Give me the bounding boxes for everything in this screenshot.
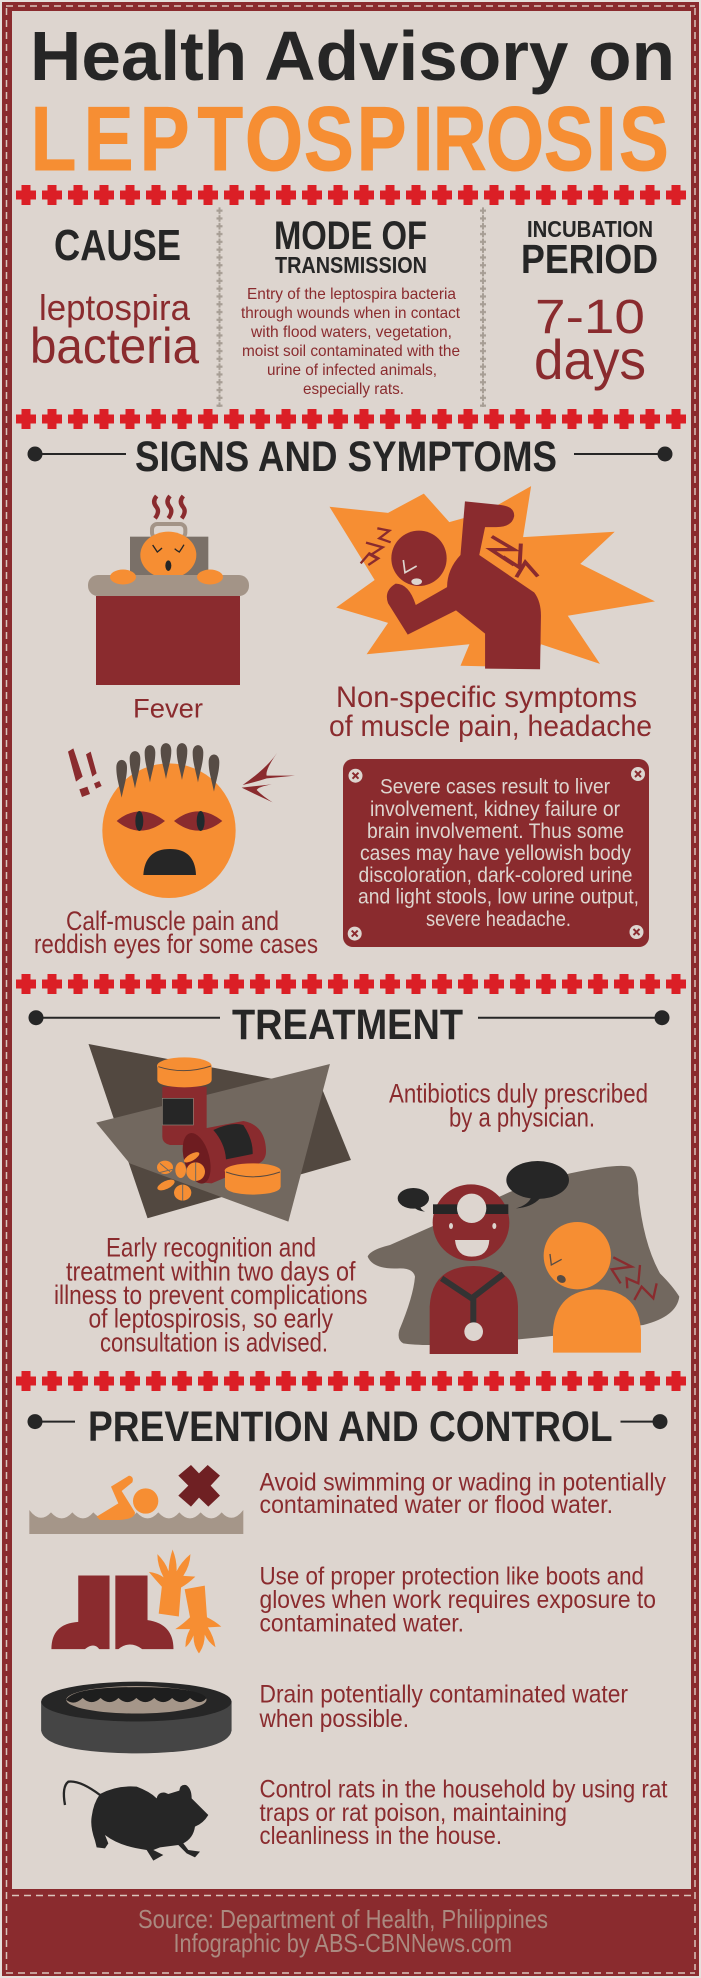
cross divider 3	[16, 974, 686, 994]
text: drain: Drain potentially contaminated water	[260, 1681, 628, 1709]
incubation heading	[521, 216, 658, 282]
icon: doctor and patient	[368, 1161, 679, 1354]
cause heading: CAUSE	[54, 221, 181, 270]
label: non-specific symptoms: of muscle pain, headache	[329, 710, 652, 743]
cause text: leptospira	[39, 287, 191, 328]
icon: reddish eyes	[68, 743, 295, 898]
icon: tire with water	[41, 1682, 232, 1753]
icon: muscle pain	[329, 486, 655, 669]
callout text: involvement, kidney failure or	[370, 798, 620, 821]
callout text: and light stools, low urine output,	[358, 886, 639, 909]
label: early recognition: treatment within two days of	[66, 1257, 356, 1287]
label: early recognition: of leptospirosis, so early	[88, 1304, 333, 1334]
text: protection: gloves when work requires exposure to	[260, 1586, 656, 1614]
incubation heading: PERIOD	[521, 236, 658, 282]
label: non-specific symptoms	[329, 681, 652, 743]
incubation text	[534, 291, 646, 391]
footer: source: Source: Department of Health, Philippines	[138, 1904, 548, 1934]
mode text: moist soil contaminated with the	[242, 343, 460, 360]
label: calf-muscle pain	[34, 906, 318, 959]
label: early recognition: Early recognition and	[106, 1233, 316, 1263]
mode text	[241, 286, 461, 398]
label: early recognition: illness to prevent complications	[54, 1280, 368, 1310]
panel: severe cases callout	[343, 759, 649, 947]
incubation heading: INCUBATION	[527, 216, 653, 242]
cross divider 4	[16, 1371, 686, 1391]
icon: no swimming	[29, 1465, 243, 1534]
text: drain	[259, 1681, 628, 1733]
heading: signs and symptoms: SIGNS AND SYMPTOMS	[135, 433, 557, 481]
screws	[348, 767, 645, 941]
label: antibiotics: Antibiotics duly prescribed	[389, 1079, 648, 1109]
panel: cause	[30, 221, 199, 374]
title	[30, 17, 675, 190]
icon: medicine	[89, 1044, 351, 1222]
speech bubbles	[398, 1161, 569, 1212]
doctor	[430, 1184, 518, 1354]
text: protection	[260, 1563, 656, 1638]
callout text: Severe cases result to liver	[380, 776, 610, 799]
text: avoid swimming: Avoid swimming or wading in potentially	[260, 1468, 666, 1496]
callout text	[358, 776, 639, 931]
steam and face	[130, 496, 208, 578]
heading: prevention and control: PREVENTION AND CONTROL	[88, 1403, 612, 1451]
text: avoid swimming: contaminated water or flood water.	[260, 1491, 613, 1519]
callout text: severe headache.	[426, 908, 571, 931]
callout text: cases may have yellowish body	[360, 842, 631, 865]
mode heading	[274, 214, 427, 278]
text: avoid swimming	[260, 1468, 666, 1519]
label: fever: Fever	[133, 694, 203, 724]
icon: boots and gloves	[51, 1549, 221, 1653]
cross divider 2	[16, 409, 686, 429]
text: control rats: cleanliness in the house.	[260, 1822, 502, 1850]
mode text: especially rats.	[303, 381, 404, 398]
heading: treatment	[28, 1001, 670, 1049]
patient	[544, 1222, 657, 1353]
label: non-specific symptoms: Non-specific symptoms	[336, 681, 637, 714]
mode text: through wounds when in contact	[241, 305, 461, 322]
mode heading: TRANSMISSION	[275, 252, 427, 278]
callout text: brain involvement. Thus some	[367, 820, 624, 843]
callout text: discoloration, dark-colored urine	[358, 864, 632, 887]
text: control rats: traps or rat poison, maintaining	[260, 1799, 567, 1827]
cross divider 1	[16, 185, 686, 205]
title line 2: LEPTOSPIROSIS	[31, 88, 669, 190]
label: early recognition: consultation is advised.	[100, 1328, 328, 1358]
icon: fever	[88, 496, 249, 685]
text: drain: when possible.	[259, 1705, 409, 1733]
heading: treatment: TREATMENT	[232, 1001, 463, 1049]
mode text: urine of infected animals,	[267, 362, 437, 379]
mode heading: MODE OF	[274, 214, 427, 258]
panel: incubation period	[521, 216, 658, 391]
dotted divider left	[216, 207, 222, 407]
icon: rat	[64, 1781, 208, 1861]
label: antibiotics: by a physician.	[449, 1103, 595, 1133]
label: early recognition	[54, 1233, 368, 1358]
incubation text: days	[534, 328, 646, 391]
text: protection: Use of proper protection like boots and	[260, 1563, 644, 1591]
footer: source	[138, 1904, 548, 1958]
text: control rats	[260, 1776, 668, 1850]
cause text	[30, 287, 199, 374]
mode text: with flood waters, vegetation,	[250, 324, 452, 341]
text: protection: contaminated water.	[260, 1610, 464, 1638]
label: calf-muscle pain: Calf-muscle pain and	[66, 906, 279, 936]
cause text: bacteria	[30, 318, 199, 374]
mode text: Entry of the leptospira bacteria	[247, 286, 456, 303]
title line 1: Health Advisory on	[30, 17, 675, 95]
label: calf-muscle pain: reddish eyes for some cases	[34, 929, 318, 959]
panel: mode of transmission	[241, 214, 461, 398]
label: antibiotics	[389, 1079, 648, 1133]
incubation text: 7-10	[535, 291, 645, 344]
footer: source: Infographic by ABS-CBNNews.com	[174, 1928, 512, 1958]
dotted divider right	[480, 207, 486, 407]
